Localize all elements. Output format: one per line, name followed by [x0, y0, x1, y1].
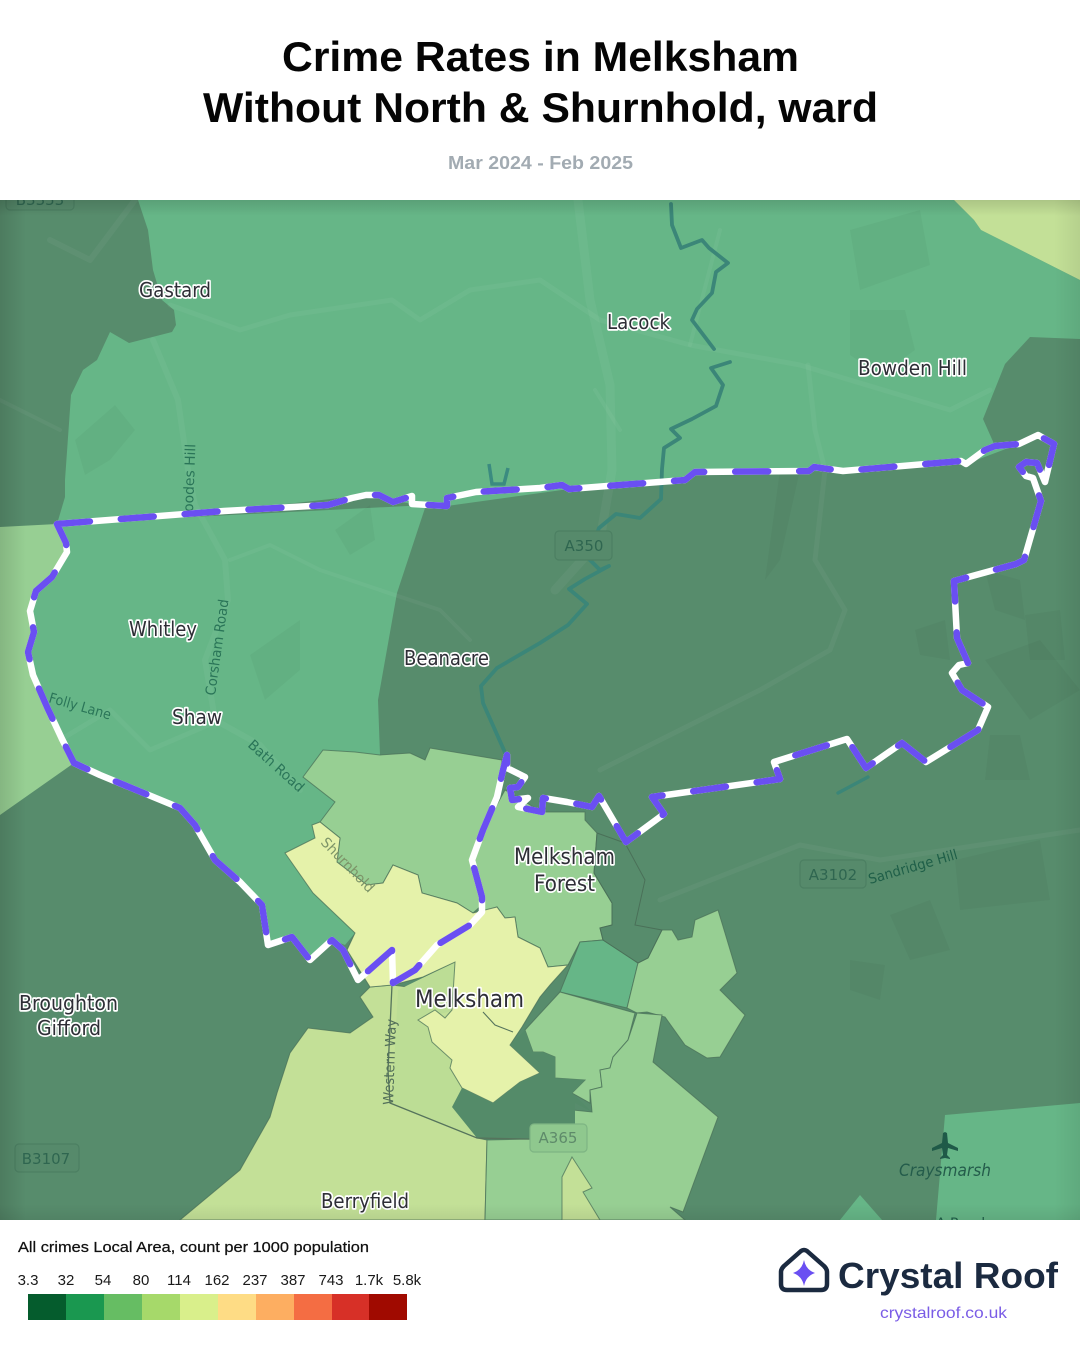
legend scale values: 114 [167, 1272, 191, 1289]
stream east of the ward [838, 777, 868, 793]
place labels: Gastard [139, 278, 211, 302]
area: central pale yellow [285, 822, 568, 1103]
place labels: Berryfield [321, 1189, 409, 1213]
road labels: Folly Lane [47, 690, 113, 723]
road labels: Bath Road [244, 737, 307, 796]
river Avon [481, 204, 730, 757]
ward boundary: white base [28, 435, 1054, 983]
legend scale values: 743 [318, 1272, 344, 1289]
road shield: B3107 [15, 1144, 79, 1172]
airport label: Craysmarsh [899, 1161, 991, 1181]
area: small medium green sliver [840, 1195, 882, 1220]
place labels: Gifford [37, 1016, 101, 1040]
legend scale values: 5.8k [393, 1272, 422, 1289]
road labels: A Road [936, 1216, 985, 1232]
road shield: A365: A365 [539, 1129, 577, 1147]
legend title: All crimes Local Area, count per 1000 population [18, 1239, 369, 1256]
place labels: Forest [534, 872, 595, 897]
logo wordmark: Crystal Roof [838, 1255, 1059, 1296]
road labels: Sandridge Hill [867, 847, 960, 888]
area: Melksham Forest light green [472, 790, 612, 967]
map base: dark green areas [0, 200, 1080, 1220]
area: south-east light green [485, 1013, 718, 1220]
map [0, 185, 1080, 1232]
legend scale values: 387 [280, 1272, 306, 1289]
subtitle: date range: Mar 2024 - Feb 2025 [448, 153, 633, 173]
icon: airport plane [932, 1132, 958, 1159]
area: pale green north-east corner [954, 200, 1080, 280]
area: Craysmarsh medium green [936, 1103, 1080, 1220]
faint woodland and field patches [1028, 640, 1056, 660]
website address: crystalroof.co.uk [880, 1305, 1008, 1322]
area: northern medium green [57, 200, 1080, 524]
road shield: A350: A350 [565, 537, 603, 555]
area: Berryfield pale green [180, 962, 487, 1220]
place labels: Melksham [415, 985, 524, 1013]
logo: Crystal Roof [781, 1250, 1059, 1322]
place labels: Bowden Hill [858, 356, 967, 380]
legend scale values: 1.7k [355, 1272, 384, 1289]
road shield: top-left, cropped [6, 200, 74, 210]
title [203, 33, 878, 131]
area: dark patch east of Forest [594, 833, 662, 963]
place labels: Broughton [19, 991, 118, 1015]
legend scale values: 162 [204, 1272, 230, 1289]
area: light green west edge [0, 524, 74, 815]
map edge shading [0, 200, 1080, 1220]
legend scale values: 80 [133, 1272, 149, 1289]
road shield: B3107: B3107 [22, 1150, 70, 1168]
road labels: Shurnhold [317, 835, 377, 896]
area: east light green [627, 910, 745, 1058]
area: ward western medium green [28, 505, 426, 960]
legend scale values: 3.3 [18, 1272, 38, 1289]
area: dark patch in south Melksham [452, 1030, 592, 1140]
title: Crime Rates in Melksham [282, 33, 799, 80]
place labels [19, 278, 967, 1213]
area: south central light green [525, 992, 635, 1103]
legend scale values: 237 [242, 1272, 268, 1289]
road labels: Corsham Road [203, 598, 232, 697]
area: north Melksham light green [303, 748, 502, 913]
pond shape north of the ward [489, 464, 508, 484]
legend [18, 1239, 422, 1320]
road shield: A3102 [800, 860, 866, 888]
legend colour swatches [28, 1294, 407, 1320]
road shield: A3102: A3102 [809, 866, 857, 884]
place labels: Whitley [129, 617, 197, 641]
title: Without North & Shurnhold, ward [203, 84, 878, 131]
faint road network [221, 309, 811, 722]
road labels: oodes Hill [181, 444, 199, 512]
place labels: Beanacre [404, 646, 489, 670]
place labels: Shaw [172, 705, 222, 729]
place labels: Melksham [514, 845, 615, 870]
area: small pale strip [562, 1157, 600, 1220]
road shield: top-left, cropped: B3353 [16, 191, 64, 209]
inner boundary line [483, 1012, 513, 1032]
road labels [47, 444, 985, 1232]
area: south-west Melksham slightly deeper green [404, 962, 462, 1088]
area: medium green square [560, 940, 638, 1008]
legend scale values: 32 [58, 1272, 74, 1289]
road shield: A350 [555, 531, 612, 560]
Western Way road line [387, 986, 530, 1140]
icon: house with star [781, 1250, 827, 1290]
legend scale values: 54 [95, 1272, 111, 1289]
road shield: A365 [530, 1124, 587, 1152]
road labels: Western Way [381, 1019, 400, 1105]
ward boundary: purple dashes [28, 435, 1054, 983]
place labels: Lacock [607, 310, 670, 334]
legend scale values [18, 1272, 422, 1289]
